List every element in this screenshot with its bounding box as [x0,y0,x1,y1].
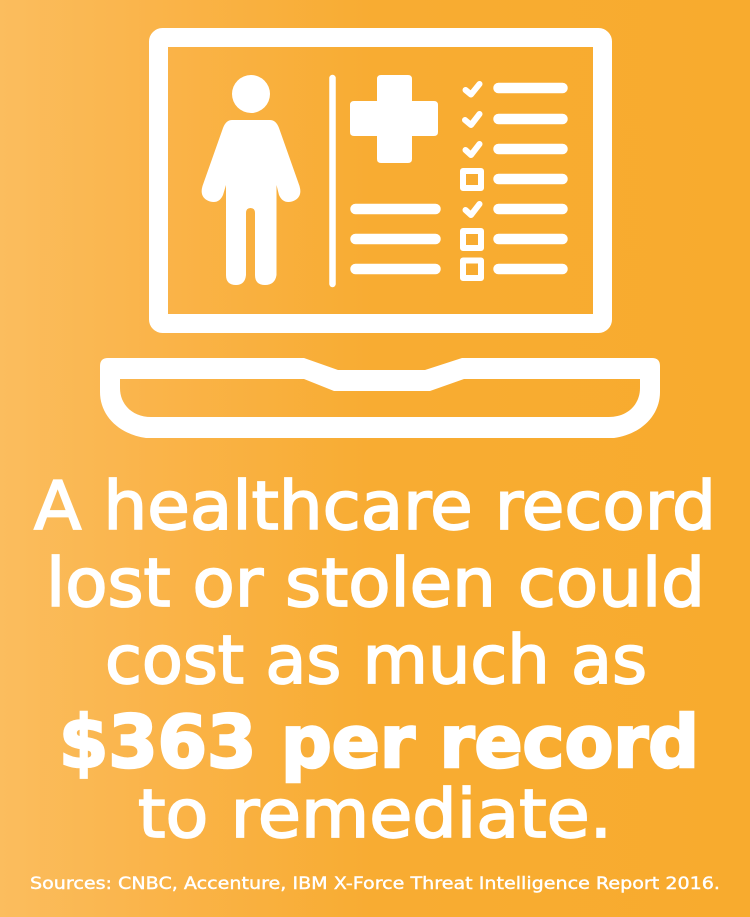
icon: medical cross [350,75,438,163]
headline line 3: cost as much as [105,621,647,699]
headline line 2: lost or stolen could [46,544,705,622]
headline [34,467,716,853]
checkboxes [463,171,481,278]
icon: laptop with medical record [100,38,660,438]
headline line 5: to remediate. [138,775,612,853]
laptop screen frame [158,38,602,324]
icon: person [202,75,300,285]
divider line [329,78,336,284]
headline line 1: A healthcare record [34,467,716,545]
highlighted amount: $363 per record [59,700,699,784]
sources: Sources: CNBC, Accenture, IBM X-Force Threat Intelligence Report 2016. [30,874,720,894]
record lines left [356,209,436,269]
checklist lines right [498,88,562,269]
laptop base [100,358,660,438]
check marks [465,84,480,215]
